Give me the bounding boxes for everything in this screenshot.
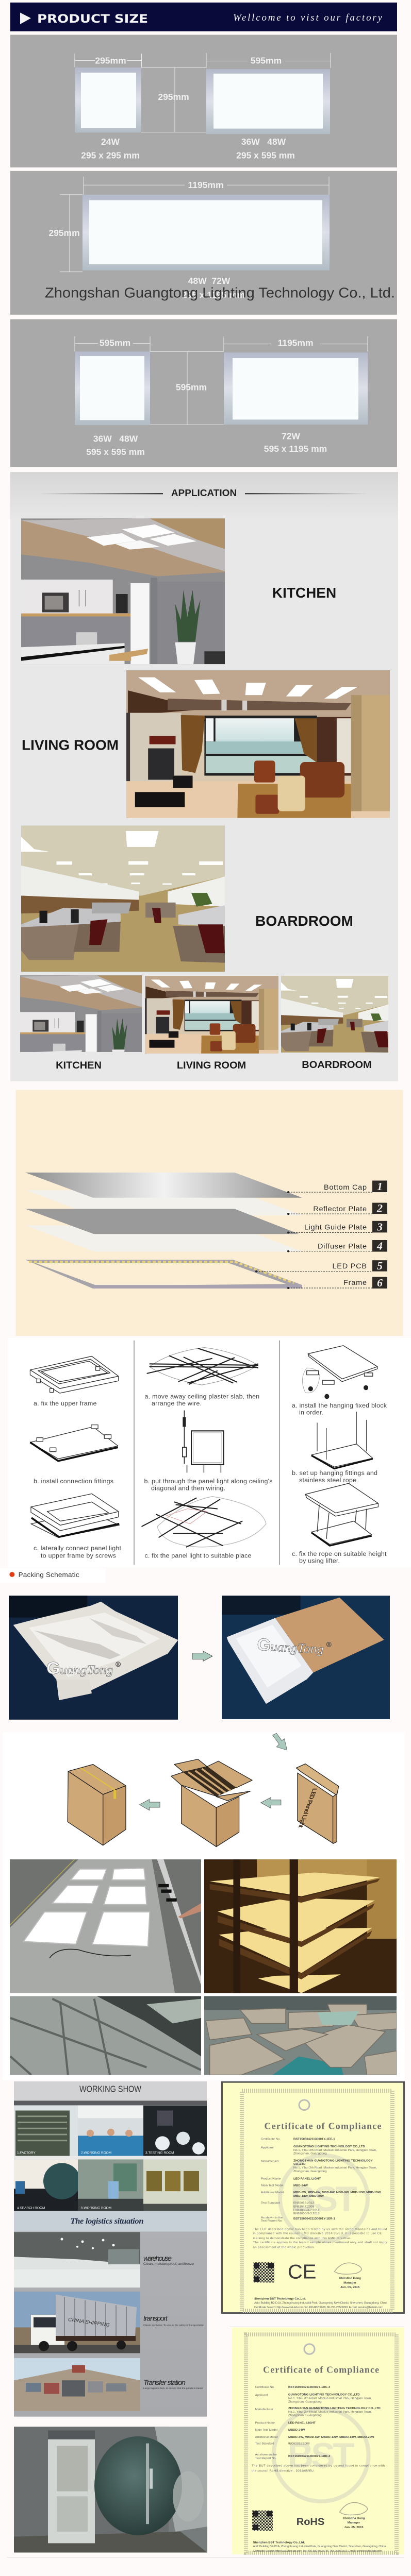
text: hanging steps [292,1402,387,1564]
number badge 5 [372,1260,387,1272]
text: ceiling steps [144,1393,272,1560]
tile: working room 5 [78,2159,143,2211]
text: ceiling steps: c. fix the panel light to suitable place [144,1552,252,1560]
text: hanging steps: b. set up hanging fittings and [292,1469,377,1477]
tile: factory: 1.FACTORY [17,2151,36,2155]
certificate fields: GUANGTONG LIGHTING TECHNOLOGY CO.,LTD [293,2145,365,2148]
certificate fields: Test Report No. [255,2457,277,2460]
label: light guide plate: Light Guide Plate [304,1224,367,1231]
number badge 3 [372,1221,387,1233]
photo: panels in warehouse [204,1996,397,2075]
certificate fields: No.1, Yihui 3th Road, Maoluo Industrial Park, Hengjian Town, [288,2411,372,2414]
label: boardroom: BOARDROOM [255,913,353,929]
tile: working room 5: 5.WORKING ROOM [81,2206,111,2210]
icon: arrow left [261,1798,281,1808]
thumbnail: living room [145,976,278,1054]
dimension: 1195mm: 1195mm [277,338,314,348]
certificate fields: BST15050421130001Y-1ER-1 [293,2217,336,2221]
RoHS mark: RoHS [297,2516,324,2528]
text: hanging steps: c. fix the rope on suitable height [292,1550,387,1557]
number badge 6: 6 [377,1277,383,1289]
certificate fields: No.1, Yihui 3th Road, Maoluo Industrial Park, Hengjian Town, [293,2149,377,2152]
tile: working room [78,2106,143,2156]
issuer: Certificate Search: http://www.bst-lab.com Tel: 400-882-9628, 86-755-26509301 E-mail: service@bst-lab.com [253,2550,382,2553]
text: warehouse: Clean, moistureproof, antifreeze [143,2262,194,2266]
certificate fields: Product Name [261,2178,281,2181]
line drawings: installation figures [30,1346,378,1547]
slogan: Wellcome to vist our factory [233,12,383,23]
panel: working show [14,2081,207,2417]
certificate fields: Certificate No. [261,2138,281,2141]
carton: closed [68,1765,126,1845]
panel: exploded structure diagram [15,1090,403,1336]
layer: diffuser plate [26,1226,302,1252]
QR code [252,2511,273,2531]
certificate fields: MBDD-24W [288,2429,305,2432]
label: 595 x 1195 mm: 595 x 1195 mm [264,444,327,454]
certificate fields: EN55015:2013 [293,2202,315,2205]
certificate fields: Manufacturer [255,2408,273,2411]
certificate fields [252,2386,385,2472]
photo: aging test on floor [10,1859,201,1993]
signature: Manager [343,2281,357,2284]
issuer: Add: Building B2-D1A, Zhongchuang Industrial Park, Guangming New District, Shenzhen, Guangdong, China [253,2545,386,2548]
label: bottom cap: Bottom Cap [324,1183,367,1192]
dimension: 295mm: 295mm [48,228,80,238]
certificate fields: EN61000-3-3:2013 [293,2212,320,2215]
label: 72W: 72W [282,431,301,442]
text: upper frame steps [34,1400,122,1560]
certificate fields: As shown in the [255,2453,277,2456]
figure: ceiling grid [147,1347,258,1385]
caption: kitchen: KITCHEN [56,1060,102,1071]
dimension: 295mm width: 295mm [95,56,126,65]
watermark: GuangTong: GuangTong [257,1635,324,1656]
panel: size 295 [10,35,397,167]
number badge 2 [372,1202,387,1214]
issuer: Shenzhen BST Technology Co.,Ltd. [253,2541,305,2544]
figure: ceiling fix [141,1497,266,1547]
photo: kitchen [21,518,225,665]
issuer: Add: Building B2-D1A, Zhongchuang Industrial Park, Guangming New District, Shenzhen, Guangdong, China [254,2301,388,2304]
signature: Christina Dong [343,2517,365,2520]
photo: foam and cardboard [222,1596,390,1719]
certificate fields: Zhongshan, Guangdong [288,2400,322,2403]
watermark: GuangTong: ® [115,1660,121,1668]
certificate fields: Applicant [261,2146,274,2149]
heading: product size: PRODUCT SIZE [37,12,148,26]
panel: size 595 [10,319,397,467]
band: logistics heading [14,2211,207,2231]
text: ceiling steps: diagonal and then wiring. [151,1485,225,1492]
text: ceiling steps: arrange the wire. [152,1400,202,1407]
certificate fields: MBDD-3W, MBDD-6W, MBDD-12W, MBDD-18W, MBDD-20W [288,2436,374,2439]
number badge 2: 2 [376,1202,383,1214]
certificate fields: Zhongshan, Guangdong [293,2170,327,2173]
number badge 1: 1 [377,1180,383,1193]
certificate fields: The EUT described above has been tested by us with the listed standards and found [253,2228,387,2231]
certificate fields: IEC62321:2008 [288,2443,310,2445]
signature: Christina Dong [339,2277,361,2280]
number badge 5: 5 [377,1260,383,1272]
panel: application [10,472,398,1081]
watermark: BST: BST [290,2179,357,2218]
figure: panel through ceiling [183,1411,224,1473]
label: 36W 48W: 36W 48W [241,137,286,147]
band: logistics heading: The logistics situation [70,2216,143,2226]
text: transport [143,2315,204,2327]
text: warehouse [143,2255,194,2266]
label: kitchen: KITCHEN [272,585,336,601]
label: frame: Frame [343,1279,367,1287]
heading: packing schematic [0,1568,106,1583]
signature [334,2263,361,2289]
photo: integrating sphere [14,2427,207,2552]
signature [339,2502,367,2529]
text: upper frame steps: b. install connection fittings [34,1478,113,1485]
dimension: 1195mm: 1195mm [188,180,224,190]
tile: search room [14,2159,80,2211]
icon: arrow left [139,1800,160,1810]
panel light 295x1195 [83,195,330,270]
carton: single panel [296,1764,339,1844]
panel light 295x295 [75,67,141,132]
panel light 595x595 [75,351,150,425]
photo: boardroom [21,825,225,972]
certificate fields: Applicant [255,2394,268,2397]
certificate: RoHS compliance [229,2327,404,2554]
number badge 3: 3 [376,1221,383,1233]
certificate fields: CO.,LTD [293,2163,306,2166]
photo: warehouse [14,2232,140,2287]
layer: bottom cap [25,1173,302,1198]
photo: stacked panels on wall [10,1996,201,2075]
watermark: GuangTong: ® [326,1640,332,1649]
certificate fields: marking to demonstrate the compliance with this EMC Directive. [253,2237,351,2240]
test cabinet [48,2430,95,2543]
certificate fields: Zhongshan, Guangdong [288,2414,322,2417]
watermark: BST: BST [288,2435,355,2475]
label: 48W 72W: 48W 72W [188,276,231,286]
certificate fields: The certificate applies to the tested sample above mentioned only and shall not imply [253,2241,387,2244]
layer: light guide plate [25,1209,299,1234]
icon: arrow diagonal [273,1733,287,1750]
photo: truck [14,2292,140,2353]
layer: frame with LED PCB [25,1260,302,1289]
certificate fields: MBD-3W, MBD-4W, MBD-6W, MBD-9W, MBD-12W, MBD-15W, [293,2191,382,2194]
text: transport: transport [143,2315,168,2323]
certificate fields: No.1, Yihui 3th Road, Maoluo Industrial Park, Hengjian Town, [293,2166,377,2170]
figure: lateral connection [31,1494,119,1537]
number badge 4: 4 [376,1240,383,1252]
header bar: product size [10,3,397,31]
text: transfer station: Transfer station [143,2379,186,2387]
number badge 4 [372,1240,387,1252]
certificate fields: Test Standard [261,2202,280,2205]
label: living room: LIVING ROOM [22,737,119,753]
thumbnail: kitchen [20,975,142,1052]
certificate fields: BST15050421130002Y-1RC-4 [288,2386,331,2389]
certificate fields: Manufacturer [261,2160,279,2163]
signature: Jun. 05, 2015 [340,2286,360,2289]
certificate fields: BST15050421130002Y-1RR-4 [288,2455,331,2458]
certificate fields: EN61000-3-2:2014 [293,2209,320,2212]
label: 595 x 595 mm: 595 x 595 mm [86,447,145,457]
figure: connection fittings [30,1425,118,1461]
panel: size 1195 [10,171,397,315]
certificate fields: Test Report No. [261,2219,283,2223]
certificate fields: MBD-18W, MBD-20W [293,2195,324,2198]
heading: packing schematic: Packing Schematic [19,1571,79,1579]
title: Certificate of Compliance [263,2365,379,2375]
photo: truck: CHINA SHIPPING [68,2317,110,2328]
certificate fields: ZHONGSHAN GUANGTONG LIGHTING TECHNOLOGY [293,2159,373,2162]
figure: upper frame [30,1356,119,1393]
photo: aging test on racks [204,1859,397,1993]
text: hanging steps: by using lifter. [299,1557,340,1564]
text: hanging steps: a. install the hanging fixed block [292,1402,387,1409]
label: 295 x 1195 mm: 295 x 1195 mm [182,290,245,300]
title: Certificate of Compliance [264,2121,382,2131]
QR code [254,2262,274,2282]
number badge 1 [372,1180,387,1193]
icon: play triangle [20,12,31,24]
heading: application: APPLICATION [171,487,237,498]
text: transport: Classic container, To ensure the safety of transportation [143,2324,204,2327]
text: warehouse: warehouse [143,2255,172,2263]
certificate fields: Test Standard [255,2443,274,2445]
certificate fields: LED PANEL LIGHT [288,2421,316,2425]
panel light 295x595 [206,69,330,134]
figure: hanging block [302,1346,377,1399]
caption: living room: LIVING ROOM [177,1060,246,1071]
certificate fields: Additional Model [255,2436,278,2439]
dimension: 295mm height: 295mm [158,92,189,102]
thumbnail: boardroom [281,976,388,1053]
label: 295 x 295 mm: 295 x 295 mm [81,150,140,160]
issuer: Shenzhen BST Technology Co.,Ltd. [254,2298,306,2301]
issuer [254,2298,388,2309]
dimension: 595mm height: 595mm [176,382,207,393]
figure: hanging rope [311,1412,373,1469]
dimension: 595mm: 595mm [100,338,130,348]
certificate fields: Product Name [255,2421,275,2425]
heading: working show: WORKING SHOW [79,2083,141,2094]
text: ceiling steps: a. move away ceiling plaster slab, then [144,1393,259,1400]
certificate fields: Additional Model [261,2191,284,2194]
certificate: CE compliance [222,2082,404,2313]
panel light 595x1195 [224,352,368,425]
panel: carton packing steps [3,1732,405,2080]
text: transfer station: Large logistics hub, to ensure that the goods in transit [143,2387,204,2390]
certificate fields: the council RoHS directive - 2011/65/EU. [252,2469,315,2472]
certificate fields: Certificate No. [255,2386,275,2389]
text: hanging steps: in order. [299,1409,323,1416]
certificate fields: MBD-24W [293,2184,308,2187]
photo: transfer station [14,2358,140,2411]
issuer [253,2541,386,2553]
text: upper frame steps: c. laterally connect panel light [34,1545,122,1552]
certificate fields: ZHONGSHAN GUANGTONG LIGHTING TECHNOLOGY CO.,LTD [288,2407,381,2410]
signature: Manager [348,2521,360,2524]
certificate fields: Main Test Model [255,2429,277,2432]
watermark: GuangTong: GuangTong [46,1659,113,1678]
icon: arrow right [192,1651,212,1661]
tile: testing machines [143,2159,207,2211]
text: ceiling steps: b. put through the panel light along ceiling's [144,1478,272,1485]
certificate fields: No.1, Yihui 3th Road, Maoluo Industrial Park, Hengjian Town, [288,2397,372,2400]
label: LED PCB: LED PCB [332,1262,367,1270]
tile: testing room [143,2106,207,2156]
signature: Jun. 05, 2015 [344,2526,364,2529]
label: diffuser plate: Diffuser Plate [318,1243,367,1251]
text: transfer station [143,2379,204,2390]
tile: working room: 2.WORKING ROOM [81,2151,111,2155]
label: 36W 48W: 36W 48W [93,434,138,444]
text: upper frame steps: a. fix the upper frame [34,1400,97,1407]
tile: factory [14,2106,78,2156]
certificate fields: The EUT described above has been considered by us and found in compliance with [252,2465,385,2468]
label: reflector plate: Reflector Plate [313,1205,367,1213]
tile: search room: 4 SEARCH ROOM [17,2206,45,2210]
carton: open [171,1759,252,1846]
label: 295 x 595 mm: 295 x 595 mm [236,150,295,160]
certificate fields: Zhongshan, Guangdong [293,2153,327,2156]
figure: lifter [305,1483,378,1546]
photo: foam wrapped panel [9,1596,178,1720]
number badge 6 [372,1277,387,1289]
panel: installation instructions [8,1338,411,1567]
certificate fields [253,2138,387,2249]
photo: living room [126,670,390,818]
caption: boardroom: BOARDROOM [302,1059,372,1071]
label: 24W: 24W [101,137,120,147]
certificate fields: BST15050421130001Y-1EE-1 [293,2138,335,2141]
issuer: Certificate Search: http://www.bst-lab.com Tel: 400-882-9628, 86-755-26509301 E-mail: service@bst-lab.com [254,2306,383,2309]
certificate fields: Main Test Model [261,2184,283,2187]
certificate fields: EN61547:2009 [293,2205,315,2208]
certificate fields: GUANGTONG LIGHTING TECHNOLOGY CO.,LTD [288,2394,360,2397]
certificate fields: in compliance with the council EMC directive 2014/30/EU. It is possible to use CE [253,2232,382,2235]
text: upper frame steps: to upper frame by screws [41,1552,116,1560]
company name overlay: Zhongshan Guangtong Lighting Technology Co., Ltd. [45,284,395,300]
dimension: 595mm width: 595mm [251,56,282,65]
tile: testing room: 3.TESTING ROOM [145,2151,174,2155]
certificate fields: an assessment of the whole production. [253,2246,315,2249]
text: hanging steps: stainless steel rope [299,1477,356,1484]
certificate fields: LED PANEL LIGHT [293,2178,321,2181]
CE mark: CE [288,2261,316,2283]
certificate fields: As shown in the [261,2216,283,2219]
carton text: LED Panel Light [297,1788,319,1827]
sphere [94,2436,182,2535]
layer: reflector plate [26,1190,302,1215]
